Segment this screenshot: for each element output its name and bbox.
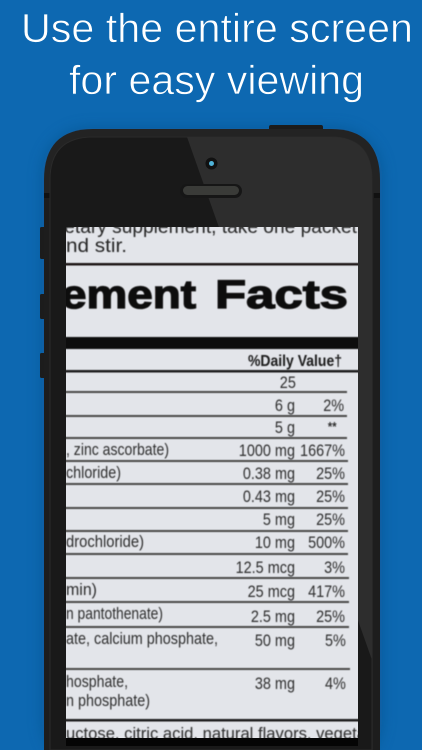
amounts column: 25 [280,374,296,392]
daily value column: 3% [324,559,345,577]
title: for easy viewing [69,57,364,103]
icon: speaker [180,184,242,198]
amounts column: 5 mg [263,511,295,529]
daily value column: ** [328,419,337,434]
table header: %Daily Value† [248,353,342,370]
title [21,5,413,103]
daily value column: 25% [316,488,345,506]
amounts column: 38 mg [255,675,295,693]
icon: top power button [269,125,323,133]
icon: camera [206,158,218,170]
amounts column: 25 mcg [248,583,295,601]
daily value column: 25% [316,465,345,483]
table rules [60,370,364,722]
ingredient names: min) [66,581,97,599]
amounts column: 10 mg [255,534,295,552]
daily value column: 25% [316,608,345,626]
daily value column: 500% [308,534,345,552]
ingredient names: chloride) [66,464,121,482]
intro text: nd stir. [66,236,127,257]
amounts column: 5 g [275,419,295,437]
ingredient names: hosphate, [66,673,128,691]
ingredient names [66,441,218,710]
bottom black band [66,738,358,746]
ingredient names: ate, calcium phosphate, [66,630,218,648]
daily value column: 2% [323,397,344,415]
ingredient names: n pantothenate) [66,605,163,623]
daily value column: 1667% [300,442,345,460]
ingredient names: n phosphate) [66,692,150,710]
amounts column: 6 g [275,397,295,415]
icon: left side buttons [40,227,46,378]
amounts column [236,374,296,693]
heading: supplement facts: ement [61,273,196,317]
daily value column: 5% [325,632,346,650]
heading: supplement facts: Facts [215,273,348,317]
amounts column: 1000 mg [239,442,295,460]
intro text: ietary supplement, take one packet [60,217,358,238]
heading: supplement facts [66,279,348,310]
other ingredients text: uctose, citric acid, natural flavors, vegeta [66,725,367,743]
intro text [66,227,358,253]
screen: supplement facts photo [60,217,367,743]
ingredient names: , zinc ascorbate) [66,441,169,459]
amounts column: 0.43 mg [243,488,295,506]
phone body [44,129,380,750]
screen glare [187,137,372,660]
daily value column: 4% [325,675,346,693]
daily value column [300,397,346,693]
amounts column: 0.38 mg [243,465,295,483]
ingredient names: drochloride) [66,533,144,551]
phone [40,125,382,750]
daily value column: 25% [316,511,345,529]
amounts column: 50 mg [255,632,295,650]
amounts column: 12.5 mcg [236,559,295,577]
daily value column: 417% [308,583,345,601]
title: Use the entire screen [21,5,413,51]
amounts column: 2.5 mg [251,608,295,626]
